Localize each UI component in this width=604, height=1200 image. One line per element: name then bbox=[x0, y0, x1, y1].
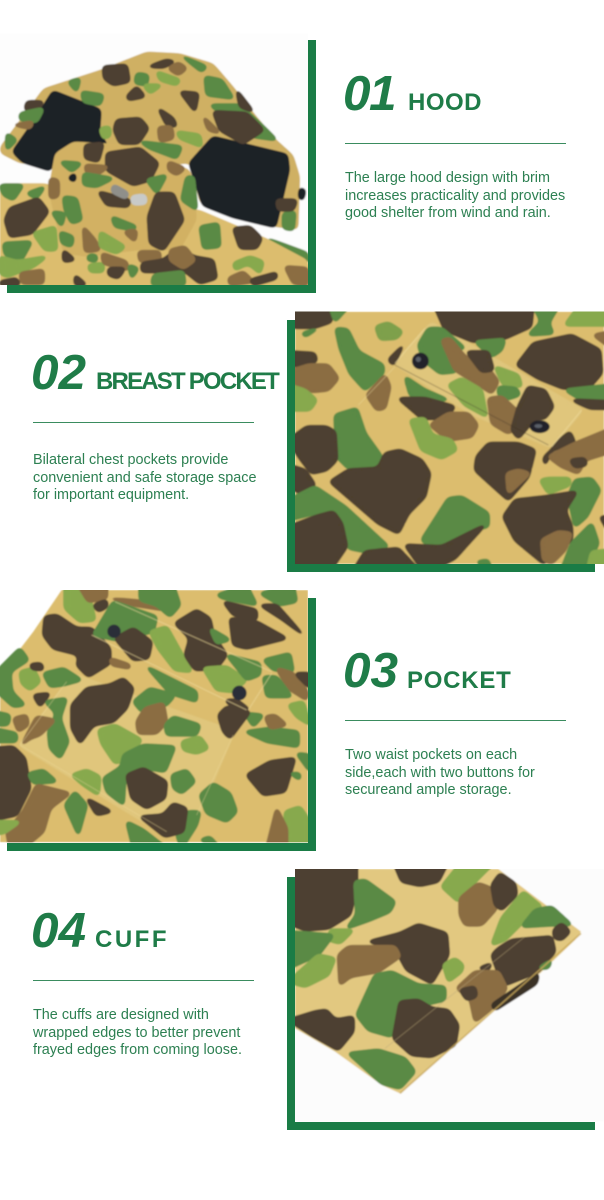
description: breast pocket: for important equipment. bbox=[33, 487, 189, 503]
frame: green corner border bbox=[287, 877, 595, 1130]
description: breast pocket: Bilateral chest pockets provide bbox=[33, 452, 228, 468]
description: cuff: wrapped edges to better prevent bbox=[33, 1025, 240, 1041]
description: breast pocket: convenient and safe storage space bbox=[33, 470, 256, 486]
frame: green corner border bbox=[7, 40, 316, 293]
description: cuff: frayed edges from coming loose. bbox=[33, 1042, 242, 1058]
photo: sleeve cuff of camouflage jacket bbox=[295, 869, 582, 1095]
number 02: 02 bbox=[31, 345, 86, 400]
description: pocket bbox=[345, 747, 535, 798]
frame: green corner border bbox=[7, 598, 316, 851]
photo: breast pocket of camouflage jacket bbox=[295, 312, 604, 564]
panel: hood feature bbox=[0, 40, 566, 293]
photo: waist pocket of camouflage jacket bbox=[0, 590, 308, 842]
panel: waist pocket feature bbox=[0, 590, 566, 851]
number 03: 03 bbox=[343, 643, 398, 698]
panel: cuff feature bbox=[31, 869, 595, 1130]
description: pocket: Two waist pockets on each bbox=[345, 747, 517, 763]
description: hood: increases practicality and provides bbox=[345, 188, 565, 204]
photo: hood of camouflage jacket bbox=[0, 50, 308, 285]
number 04: 04 bbox=[31, 903, 86, 958]
panel: breast pocket feature bbox=[31, 312, 604, 572]
heading: hood: HOOD bbox=[408, 89, 482, 116]
description: breast pocket bbox=[33, 452, 256, 503]
description: hood: good shelter from wind and rain. bbox=[345, 205, 551, 221]
heading: breast pocket: BREAST POCKET bbox=[96, 368, 278, 395]
description: pocket: side,each with two buttons for bbox=[345, 765, 535, 781]
frame: green corner border bbox=[287, 320, 595, 572]
heading: pocket: POCKET bbox=[407, 667, 512, 694]
heading: cuff: CUFF bbox=[95, 926, 169, 953]
number 01: 01 bbox=[343, 66, 395, 121]
description: cuff bbox=[33, 1007, 242, 1058]
description: pocket: secureand ample storage. bbox=[345, 782, 512, 798]
description: hood: The large hood design with brim bbox=[345, 170, 550, 186]
description: hood bbox=[345, 170, 565, 221]
description: cuff: The cuffs are designed with bbox=[33, 1007, 209, 1023]
